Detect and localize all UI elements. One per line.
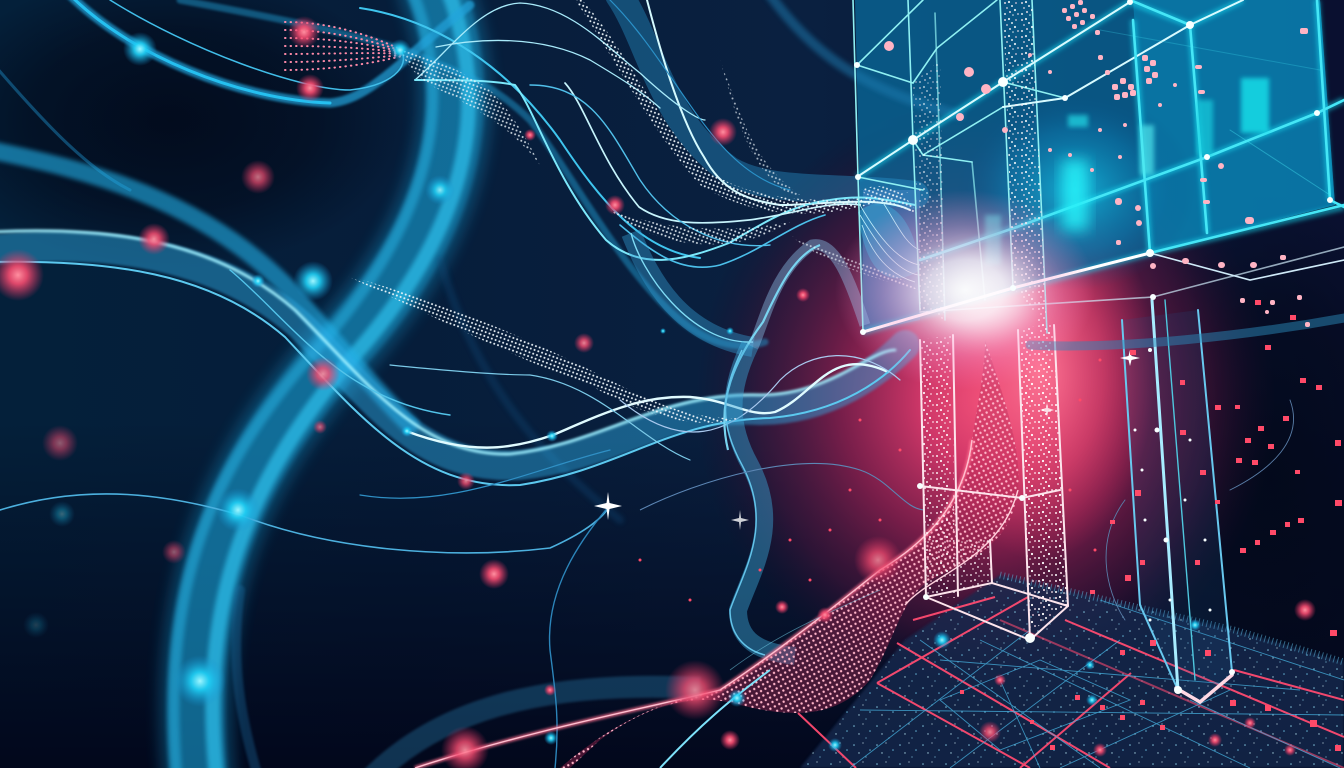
data blocks in the structure <box>985 78 1269 265</box>
dotted columns <box>913 0 1068 632</box>
striated translucent shell at structure edge <box>858 198 920 282</box>
cyan structure haze <box>855 0 1335 332</box>
faint ribbons <box>0 0 960 520</box>
white dotted ribbons <box>345 0 918 423</box>
upper stream bands and lines <box>70 0 915 346</box>
pink dot clusters in the upper structure <box>884 0 1310 327</box>
wireframe upper structure, glow layer <box>857 0 1344 332</box>
red glow behind structure <box>695 100 1275 700</box>
pink data ribbon rising to the glow <box>360 340 1019 768</box>
lower wireframe column edges <box>920 325 1068 640</box>
pink dotted fan at upper left <box>285 22 402 70</box>
twisting ribbon descending from centre <box>550 233 925 768</box>
scattered red particles around the right column <box>638 300 1342 751</box>
main horizontal stream <box>0 231 910 553</box>
sparkle stars <box>594 350 1140 530</box>
large blue ribbon on the left <box>174 0 469 768</box>
wireframe upper structure, edges <box>853 0 1344 333</box>
floor grid <box>798 575 1344 768</box>
structure junction nodes <box>854 0 1333 694</box>
right rear column <box>1030 300 1344 702</box>
central white-hot glow <box>835 190 1095 390</box>
